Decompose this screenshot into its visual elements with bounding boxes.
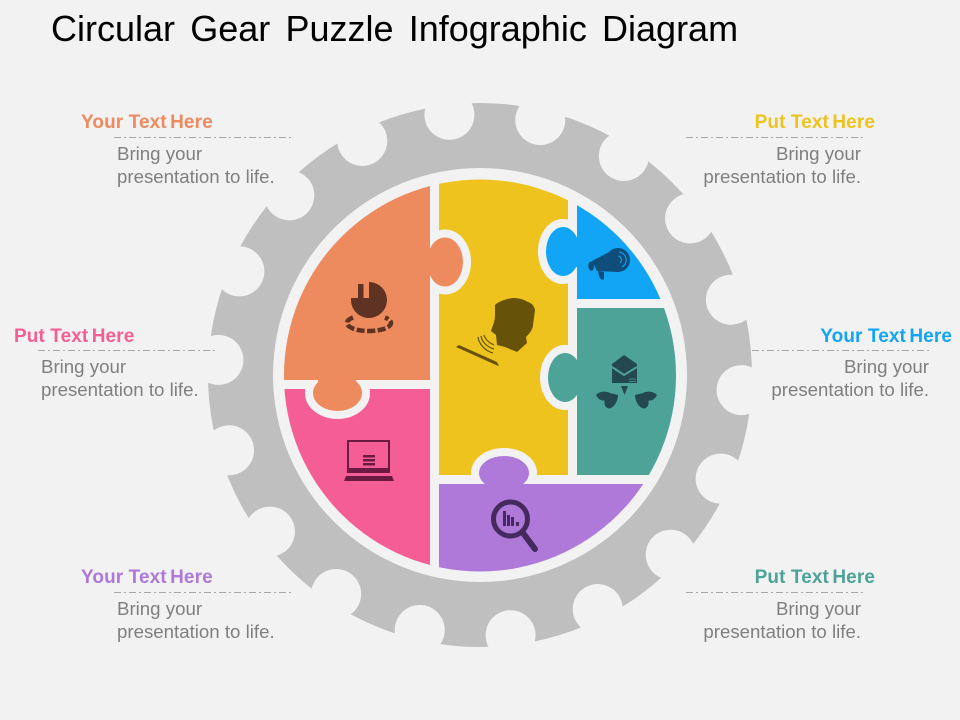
callout: middle left: presentation to life. [41, 379, 199, 400]
callout: top left: Bring your [117, 143, 202, 164]
callout: bottom left: Bring your [117, 598, 202, 619]
icon: envelope with birds [596, 355, 657, 408]
title: Circular Gear Puzzle Infographic Diagram [51, 8, 738, 49]
callout: middle right: presentation to life. [771, 379, 929, 400]
panel: teal puzzle piece [548, 308, 687, 475]
callout: middle left: Put Text Here [14, 326, 134, 347]
callout: top left: presentation to life. [117, 166, 275, 187]
callout: middle right: Your Text Here [820, 326, 952, 347]
panel: orange puzzle piece [270, 170, 463, 411]
callout: bottom right: Put Text Here [755, 567, 875, 588]
panel: yellow puzzle piece [439, 170, 568, 475]
icon: pie chart with alert [347, 282, 391, 331]
callout: bottom right: Bring your [776, 598, 861, 619]
panel: purple puzzle piece [439, 448, 644, 572]
icon: laptop [344, 440, 394, 481]
callout: top left [81, 112, 293, 187]
callout: bottom left: presentation to life. [117, 621, 275, 642]
gear ring [192, 87, 768, 663]
icon: megaphone [588, 248, 630, 280]
callout: middle left [14, 326, 217, 400]
callout: bottom left: Your Text Here [81, 567, 213, 588]
icon: magnifier with bars [494, 502, 535, 549]
callout: top left: Your Text Here [81, 112, 213, 133]
callout: middle right: Bring your [844, 356, 929, 377]
panel: blue puzzle piece [538, 205, 660, 299]
callout: top right [686, 112, 875, 187]
callout: bottom left [81, 567, 293, 642]
callout: top right: presentation to life. [703, 166, 861, 187]
callout: middle right [752, 326, 952, 400]
callout: top right: Put Text Here [755, 112, 875, 133]
icon: speaking head with pen [456, 298, 535, 366]
panel: pink puzzle piece [284, 389, 430, 565]
callout: top right: Bring your [776, 143, 861, 164]
callout: bottom right: presentation to life. [703, 621, 861, 642]
callout: middle left: Bring your [41, 356, 126, 377]
callout: bottom right [686, 567, 875, 642]
